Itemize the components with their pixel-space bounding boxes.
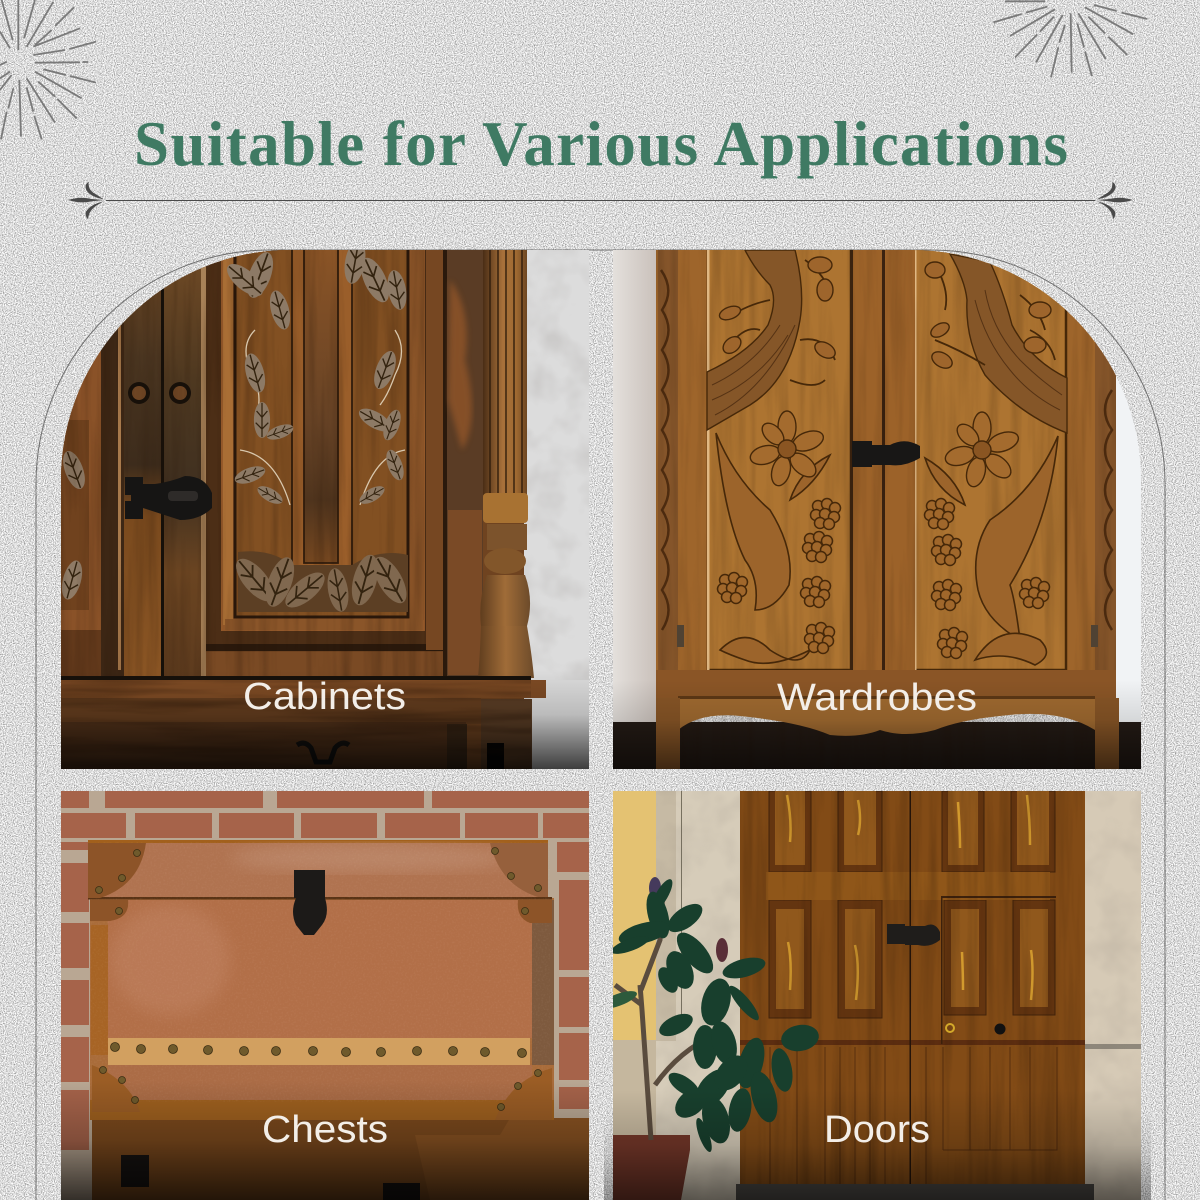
carved leaves	[716, 433, 1058, 665]
bottom foliage	[229, 551, 413, 614]
small carved sprigs	[725, 260, 1055, 385]
door	[740, 791, 1085, 1184]
brick wall	[61, 791, 589, 1150]
label: wardrobes: Wardrobes	[777, 677, 977, 719]
stone surround	[656, 791, 740, 1200]
leather speckle	[90, 842, 550, 1102]
center stiles	[124, 290, 161, 676]
knobs	[128, 382, 150, 404]
lock and brass ring	[994, 1024, 1006, 1034]
bottom rail and apron	[656, 670, 1116, 698]
bottom shade	[61, 682, 589, 769]
title: Suitable for Various Applications	[134, 109, 1068, 179]
fluted column	[483, 250, 527, 495]
hasp latch	[125, 476, 212, 520]
hasp latch	[887, 924, 940, 946]
rails and center gap	[766, 872, 1050, 900]
carved side strips	[658, 250, 678, 700]
bottom edge shadow around doors panel	[604, 1110, 1151, 1200]
panel: wardrobes	[613, 250, 1141, 769]
center stiles	[851, 250, 882, 700]
painted yellow streaks	[787, 795, 1032, 1000]
wood grain	[656, 250, 1116, 769]
panel: cabinets	[58, 239, 589, 769]
door panels	[709, 250, 851, 670]
main chest body	[90, 898, 554, 1120]
plant pot	[613, 1135, 690, 1200]
plaster wall	[524, 250, 589, 769]
panel: doors	[597, 791, 1141, 1200]
wood grain, door	[61, 250, 446, 680]
recessed panels	[769, 791, 1055, 1018]
wardrobe body	[656, 250, 1116, 700]
bottom shade	[61, 1080, 589, 1200]
chest lid	[103, 843, 538, 897]
corner caps	[88, 843, 552, 1120]
label: chests: Chests	[262, 1109, 388, 1151]
decorative sunburst top right	[993, 1, 1147, 77]
label: cabinets: Cabinets	[243, 676, 406, 718]
bottom shade	[613, 692, 1141, 769]
carved trunks	[707, 250, 1067, 433]
plant stems	[615, 890, 715, 1140]
bottom shade	[613, 1090, 1141, 1200]
lower chest	[92, 1120, 509, 1200]
vines and leaves	[240, 330, 405, 505]
plant leaves	[597, 876, 821, 1154]
center raised panel	[292, 250, 352, 573]
decorative sunburst top left	[0, 0, 96, 139]
step	[736, 1184, 1094, 1200]
title divider with ornaments	[68, 182, 1133, 219]
carved flowers	[748, 411, 1021, 489]
panel: chests	[61, 791, 589, 1200]
carved grape clusters	[718, 498, 1050, 658]
left door	[61, 340, 101, 630]
drawer handle	[297, 743, 349, 762]
arch outline	[36, 250, 1165, 1200]
yellow wall	[613, 791, 657, 1041]
base shelf	[61, 676, 531, 680]
hinges	[677, 625, 684, 647]
hasp latch	[852, 441, 920, 467]
right leg	[481, 699, 532, 769]
right door frame	[206, 250, 446, 650]
plank lines	[770, 1047, 1057, 1184]
wood grain	[740, 791, 1085, 1184]
right stile	[426, 250, 444, 650]
studded strip	[108, 1038, 530, 1065]
wood grain, base	[61, 680, 531, 749]
label: doors: Doors	[824, 1109, 930, 1151]
hasp latch	[293, 870, 327, 935]
